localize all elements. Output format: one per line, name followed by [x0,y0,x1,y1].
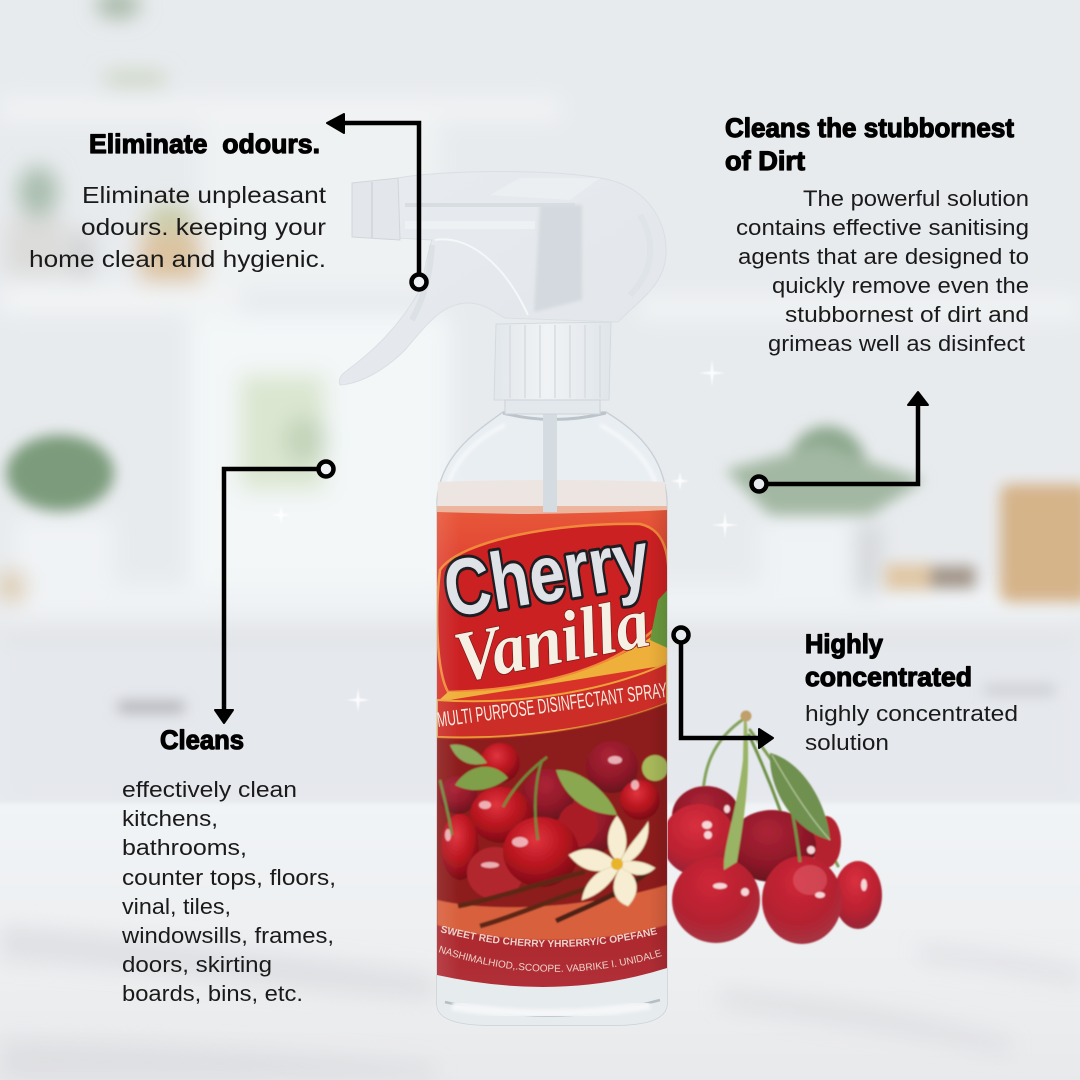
heading: cleans stubbornest: of Dirt [725,146,805,176]
heading: highly concentrated: concentrated [805,662,972,692]
label small print: SWEET RED CHERRY YHRERRY/C OPEFANE [440,926,658,947]
vanilla flower [569,816,655,906]
marble veining [0,925,1080,1080]
text: cleans stubbornest body: The powerful solution [803,186,1029,211]
cherry: back right [728,810,816,882]
text: cleans body: kitchens, [122,806,218,831]
text: cleans body: doors, skirting [122,952,272,977]
text: cleans stubbornest body: stubbornest of dirt and [785,302,1029,327]
sprayer collar [494,322,611,414]
bottle body [437,400,667,1025]
spray bottle [338,171,686,1026]
heading: cleans: Cleans [160,725,244,755]
cherry stems [703,718,838,866]
text: cleans body: counter tops, floors, [122,865,336,890]
text: cleans stubbornest body: agents that are designed to [738,244,1029,269]
dip tube [543,400,557,512]
text: cleans stubbornest body [736,186,1029,356]
cherry main stem [724,715,748,870]
text: highly concentrated body: solution [805,730,889,755]
heading: highly concentrated [805,629,972,692]
cherry: back top [672,786,740,846]
text: cleans body: bathrooms, [122,835,247,860]
arrow: cleans [215,462,334,723]
text: eliminate odours body: odours. keeping your [81,214,326,240]
text: cleans body: boards, bins, etc. [122,981,303,1006]
label swoosh [437,524,669,692]
text: cleans stubbornest body: contains effective sanitising [736,215,1029,240]
text: cleans body: windowsills, frames, [121,923,334,948]
heading: cleans stubbornest [725,113,1014,176]
label artwork [437,703,668,940]
trigger head [339,172,666,385]
product label [437,510,667,987]
heading: eliminate odours: Eliminate odours. [89,129,320,159]
text: highly concentrated body [805,701,1018,755]
sparkles [271,360,738,712]
text: cleans stubbornest body: quickly remove even the [772,273,1029,298]
text: cleans stubbornest body: grimeas well as disinfect [768,331,1025,356]
label title cherry: Cherry [438,514,656,634]
arrow: eliminate odours [327,114,426,290]
text: cleans body [121,777,336,1006]
heading: highly concentrated: Highly [805,629,883,659]
arrow: highly concentrated [674,628,773,748]
text: eliminate odours body: Eliminate unpleasant [82,182,327,208]
text: eliminate odours body [29,182,327,272]
product label: NASHIMALHIOD,.SCOOPE. VABRIKE I. UNIDALE [438,946,662,972]
text: cleans body: vinal, tiles, [122,894,231,919]
cherry: back left [662,804,736,876]
text: highly concentrated body: highly concentrated [805,701,1018,726]
cherry: front left [672,857,760,943]
cherries on table [662,710,882,944]
label band [437,663,667,738]
product label: MULTI PURPOSE DISINFECTANT SPRAY [436,679,669,732]
cherry: front right [762,856,842,944]
cherry highlights [793,865,827,895]
text: cleans body: effectively clean [122,777,297,802]
cherry: back far right [811,816,841,868]
nozzle [352,178,400,240]
cherry: right [834,861,882,929]
label title vanilla: Vanilla [448,582,655,698]
pump column [534,205,582,312]
text: eliminate odours body: home clean and hygienic. [29,246,326,272]
heading: cleans stubbornest: Cleans the stubbornest [725,113,1014,143]
bottle base [437,948,667,1025]
leaf [770,753,830,840]
arrow: stubbornest [752,392,928,492]
liquid top [437,480,667,513]
